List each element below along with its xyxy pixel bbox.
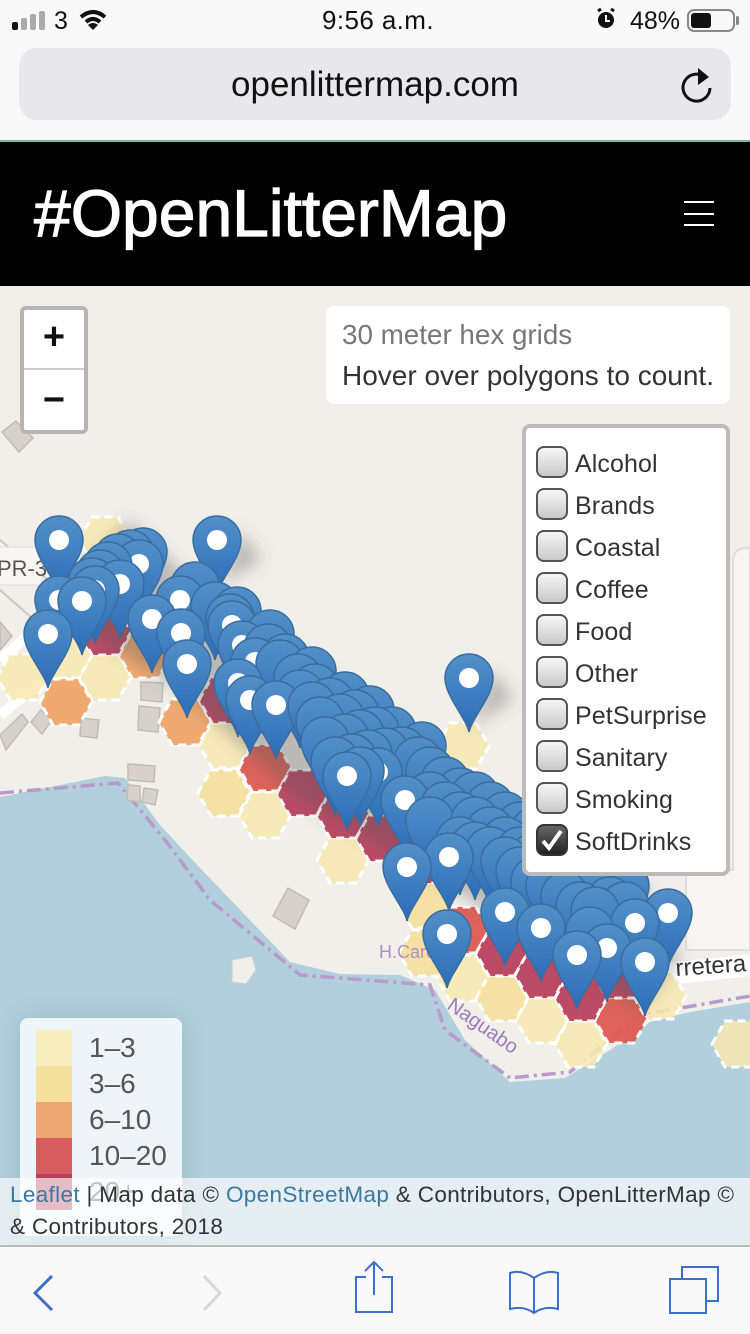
map pins xyxy=(24,516,692,1016)
icon: bookmarks xyxy=(510,1272,558,1313)
map label: PR-3 xyxy=(0,547,47,585)
checkbox: Coffee xyxy=(536,572,649,604)
checkbox: Other: Other xyxy=(575,660,638,688)
sea xyxy=(0,776,750,1246)
status bar xyxy=(0,0,750,40)
carrier: 3 xyxy=(54,7,68,35)
checkbox: Sanitary xyxy=(536,740,668,772)
icon: share xyxy=(356,1262,392,1312)
attribution bar xyxy=(0,1178,750,1245)
legend swatch 6-10 xyxy=(36,1102,72,1138)
checkbox: Coffee: Coffee xyxy=(575,576,649,604)
buildings xyxy=(0,421,309,929)
map label: Hucares: H.Cares xyxy=(379,942,445,962)
legend swatch 20+ xyxy=(36,1174,72,1210)
browser address bar xyxy=(0,40,750,142)
checkbox: Food: Food xyxy=(575,618,632,646)
legend label 6-10: 6–10 xyxy=(89,1104,151,1135)
checkbox: SoftDrinks (checked): SoftDrinks xyxy=(575,828,691,856)
legend label 3-6: 3–6 xyxy=(89,1068,136,1099)
checkbox: Brands xyxy=(536,488,655,520)
checkbox: Coastal: Coastal xyxy=(575,534,660,562)
legend label 20+: 20+ xyxy=(89,1176,136,1207)
legend swatch 10-20 xyxy=(36,1138,72,1174)
icon: reload xyxy=(681,68,712,103)
boundary line xyxy=(0,783,750,1078)
zoom in xyxy=(24,310,84,370)
icon: alarm xyxy=(598,9,614,28)
hexagon grid xyxy=(0,517,750,1067)
icon: tabs xyxy=(670,1267,718,1313)
checkbox: SoftDrinks (checked) xyxy=(536,824,691,856)
map label: Naguabo: Naguabo xyxy=(443,994,522,1059)
roads xyxy=(0,540,750,975)
legend xyxy=(20,1018,182,1236)
site title: #OpenLitterMap xyxy=(34,176,507,250)
icon: signal strength xyxy=(12,11,45,30)
url text: openlittermap.com xyxy=(231,65,519,104)
icon: forward xyxy=(204,1276,220,1310)
land background xyxy=(0,286,750,1246)
icon: hamburger menu xyxy=(684,201,714,226)
info heading: 30 meter hex grids xyxy=(342,319,572,350)
building: large block by road xyxy=(686,548,750,950)
map xyxy=(0,286,750,1245)
battery percent: 48% xyxy=(630,7,680,35)
layer checkbox panel xyxy=(522,424,730,876)
checkbox: Alcohol xyxy=(536,446,658,478)
legend swatch 1-3 xyxy=(36,1030,72,1066)
checkbox: Coastal xyxy=(536,530,660,562)
checkbox: Smoking: Smoking xyxy=(575,786,673,814)
checkbox: Alcohol: Alcohol xyxy=(575,450,658,478)
clock: 9:56 a.m. xyxy=(322,5,434,35)
legend swatch 3-6 xyxy=(36,1066,72,1102)
browser toolbar xyxy=(0,1245,750,1334)
island xyxy=(232,956,256,984)
checkbox: Food xyxy=(536,614,632,646)
zoom in: + xyxy=(43,316,65,358)
pin shadows xyxy=(60,520,680,1010)
checkbox: PetSurprise xyxy=(536,698,707,730)
info text: Hover over polygons to count. xyxy=(342,360,714,391)
checkbox: Other xyxy=(536,656,638,688)
icon: wifi xyxy=(81,12,105,30)
attribution bar: Leaflet | Map data © OpenStreetMap & Contributors, OpenLitterMap © xyxy=(10,1182,734,1207)
zoom out: − xyxy=(43,379,65,421)
url field xyxy=(19,48,731,120)
checkbox: Brands: Brands xyxy=(575,492,655,520)
attribution bar: & Contributors, 2018 xyxy=(10,1214,223,1239)
checkbox: Smoking xyxy=(536,782,673,814)
info panel xyxy=(326,306,730,404)
map label: carretera: rretera xyxy=(675,950,748,982)
site header xyxy=(0,142,750,286)
checkbox: Sanitary: Sanitary xyxy=(575,744,668,772)
icon: back xyxy=(35,1276,52,1310)
icon: battery xyxy=(688,10,739,31)
zoom control xyxy=(20,306,88,434)
checkbox: PetSurprise: PetSurprise xyxy=(575,702,707,730)
legend label 1-3: 1–3 xyxy=(89,1032,136,1063)
legend label 10-20: 10–20 xyxy=(89,1140,167,1171)
